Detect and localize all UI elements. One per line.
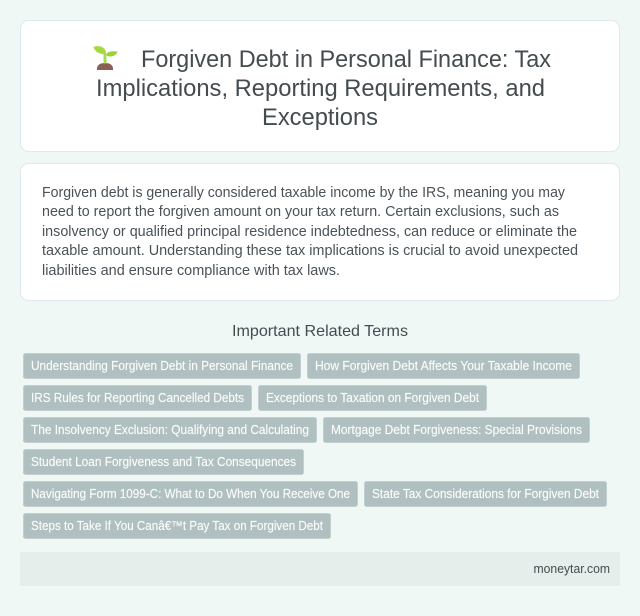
tag: Navigating Form 1099-C: What to Do When You Receive One [31, 487, 350, 501]
tag [308, 354, 580, 378]
tag: How Forgiven Debt Affects Your Taxable Income [315, 359, 572, 373]
tag list [24, 354, 606, 538]
summary text: need to report the forgiven amount on your tax return. Certain exclusions, such as [42, 204, 559, 220]
tag: IRS Rules for Reporting Cancelled Debts [31, 391, 244, 405]
tag: Understanding Forgiven Debt in Personal Finance [31, 359, 293, 373]
tag: Steps to Take If You Canâ€™t Pay Tax on Forgiven Debt [31, 519, 323, 533]
title text: Exceptions [262, 104, 378, 131]
tag [258, 386, 486, 410]
tag [324, 418, 590, 442]
summary text: taxable amount. Understanding these tax implications is crucial to avoid unexpected [42, 243, 578, 259]
tag: The Insolvency Exclusion: Qualifying and Calculating [31, 423, 309, 437]
tag [24, 514, 330, 538]
title text: Forgiven Debt in Personal Finance: Tax [141, 46, 551, 73]
title text [96, 46, 551, 131]
tag [24, 482, 358, 506]
title text: Implications, Reporting Requirements, and [96, 75, 545, 102]
tag [24, 450, 304, 474]
summary text [42, 185, 578, 279]
tag: Exceptions to Taxation on Forgiven Debt [266, 391, 479, 405]
panel: summary card [20, 164, 620, 300]
summary text: Forgiven debt is generally considered taxable income by the IRS, meaning you may [42, 185, 566, 201]
tag [24, 418, 316, 442]
icon: seedling [93, 46, 118, 70]
footer [20, 552, 620, 586]
tag [24, 354, 300, 378]
tag: Student Loan Forgiveness and Tax Consequences [31, 455, 296, 469]
tag [364, 482, 606, 506]
heading: important related terms: Important Related Terms [232, 323, 408, 340]
panel: title card [20, 20, 620, 152]
tag [24, 386, 252, 410]
summary text: liabilities and ensure compliance with tax laws. [42, 263, 340, 279]
summary text: insolvency or qualified principal residence indebtedness, can reduce or eliminate the [42, 224, 577, 240]
tag: Mortgage Debt Forgiveness: Special Provisions [331, 423, 582, 437]
source credit: moneytar.com [534, 562, 610, 576]
tag: State Tax Considerations for Forgiven Debt [372, 487, 599, 501]
